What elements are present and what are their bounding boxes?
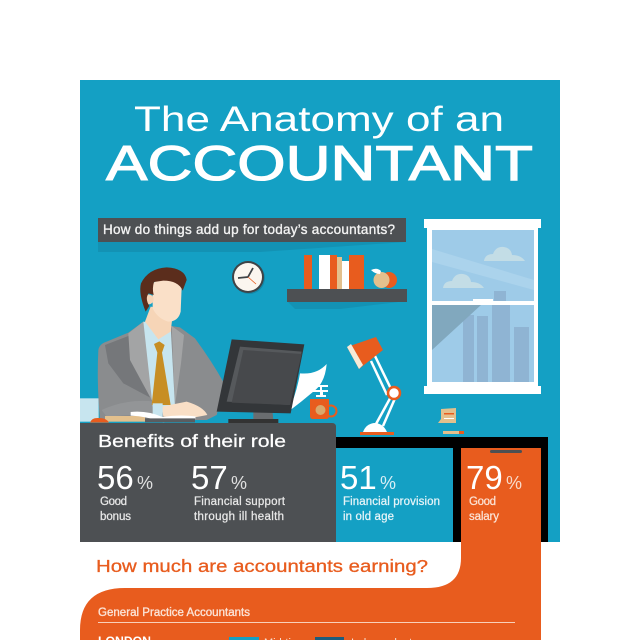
jacket — [98, 322, 225, 420]
stat: financial support: Financial support — [194, 496, 286, 508]
title: The Anatomy of an — [134, 100, 504, 139]
subtitle banner — [98, 218, 406, 252]
panel: dark benefits panel — [80, 423, 336, 542]
stat: good bonus — [97, 459, 153, 523]
legend — [229, 637, 412, 640]
panel: financial provision stat: Financial provision — [343, 496, 440, 508]
stat: financial support: 57 — [191, 459, 228, 496]
bookshelf — [287, 255, 407, 309]
hand and book — [162, 402, 207, 418]
stat: good bonus: 56 — [97, 459, 134, 496]
icon: apple — [371, 269, 397, 288]
title: ACCOUNTANT — [106, 137, 533, 191]
neck and face — [145, 307, 173, 339]
panel: orange earnings panel — [80, 448, 541, 640]
stat: financial support: % — [231, 473, 247, 493]
panel: blue office scene background — [80, 80, 560, 542]
stat: good salary: % — [506, 473, 522, 493]
icon: coffee mug — [310, 385, 336, 419]
desk frame — [336, 437, 548, 542]
heading: earnings: How much are accountants earning? — [96, 556, 428, 576]
stat: good bonus: % — [137, 473, 153, 493]
hair — [140, 267, 187, 312]
stat: good salary — [466, 450, 522, 523]
panel: financial provision stat: 51 — [340, 459, 377, 496]
stat: good salary: Good — [469, 496, 496, 508]
heading: benefits: Benefits of their role — [98, 431, 286, 451]
icon: wall clock — [232, 261, 265, 294]
subtitle banner: How do things add up for today’s accountants? — [103, 222, 395, 237]
stat: good salary: salary — [469, 511, 499, 523]
icon: sticky note and pencil — [438, 408, 464, 434]
panel: financial provision stat — [336, 448, 453, 542]
panel: financial provision stat: in old age — [343, 511, 394, 523]
section heading: general practice: General Practice Accountants — [98, 607, 250, 619]
skyline — [463, 291, 529, 382]
panel: financial provision stat: % — [380, 473, 396, 493]
clouds — [443, 247, 525, 288]
title — [106, 100, 533, 191]
stat: good bonus: Good — [100, 496, 127, 508]
paper — [288, 364, 327, 412]
icon: desk lamp — [347, 337, 400, 435]
monitor — [253, 403, 273, 420]
tie — [152, 341, 171, 405]
shirt — [143, 322, 175, 407]
stat: financial support: through ill health — [194, 511, 284, 523]
stat: financial support — [191, 459, 286, 523]
person at desk — [80, 267, 327, 423]
stat: good bonus: bonus — [100, 511, 131, 523]
window — [424, 219, 541, 394]
stat: good salary: 79 — [466, 459, 503, 496]
